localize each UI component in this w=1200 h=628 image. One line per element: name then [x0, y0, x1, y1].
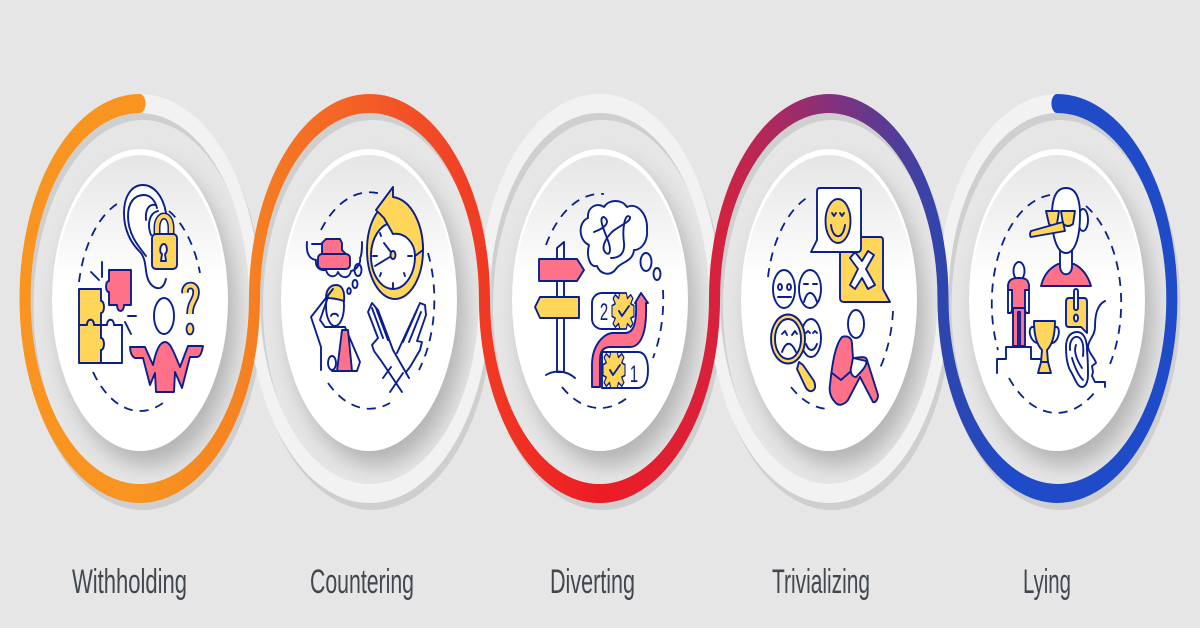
icon: neutral and sad faces	[773, 270, 821, 308]
coloured gradient wave	[25, 103, 1172, 494]
disc shadows	[60, 164, 1153, 466]
panel: trivializing	[741, 149, 917, 451]
icon: step two badge: 2	[600, 300, 608, 326]
icon: crossed arms	[368, 303, 426, 392]
icon: thought cloud with scribble	[581, 201, 660, 280]
panel: lying	[969, 149, 1145, 451]
dashed orbit	[992, 195, 1121, 413]
white disc	[52, 149, 228, 451]
icon: ear with padlock	[124, 185, 177, 288]
panel: withholding	[52, 149, 228, 451]
white disc	[512, 149, 688, 451]
white disc	[281, 149, 457, 451]
icon: smiley speech bubble	[811, 188, 861, 252]
icon: shrugging person	[130, 298, 203, 392]
dashed orbit	[546, 194, 663, 408]
panel: countering	[281, 149, 457, 451]
icon: step one badge: 1	[630, 362, 638, 388]
icon: ear and face profile	[1066, 301, 1105, 387]
dashed orbit	[768, 197, 893, 409]
label: withholding: Withholding	[72, 563, 187, 601]
label: lying: Lying	[1023, 563, 1071, 601]
icon: puzzle pieces	[79, 262, 136, 363]
icon: trophy	[1030, 321, 1059, 373]
icon: man on podium	[997, 262, 1040, 373]
icon: clock with back arrow	[367, 187, 423, 299]
icon: pink path arrow	[592, 293, 648, 387]
white disc	[741, 149, 917, 451]
pale return ring	[140, 103, 1057, 494]
icon: alert bubble	[1066, 289, 1087, 333]
icon: thought cloud with tank	[307, 239, 362, 294]
panel: diverting	[512, 149, 688, 451]
icon: magnifier on sad face	[771, 314, 821, 391]
icon: step two badge	[592, 293, 634, 329]
icon: question mark	[185, 286, 196, 334]
label: countering: Countering	[310, 563, 414, 601]
white disc	[969, 149, 1145, 451]
dashed orbit	[321, 192, 434, 409]
dashed orbit	[79, 202, 200, 411]
label: diverting: Diverting	[550, 563, 635, 601]
icon: step one badge	[602, 352, 648, 388]
icon: wounded soldier	[311, 285, 360, 371]
icon: person sitting with head down	[830, 310, 878, 405]
icon: signpost	[535, 242, 584, 378]
icon: long-nosed man with glasses	[1030, 188, 1091, 286]
ring shadows	[28, 110, 1175, 501]
icon: yellow cross bubble	[840, 237, 890, 302]
label: trivializing: Trivializing	[772, 563, 870, 601]
